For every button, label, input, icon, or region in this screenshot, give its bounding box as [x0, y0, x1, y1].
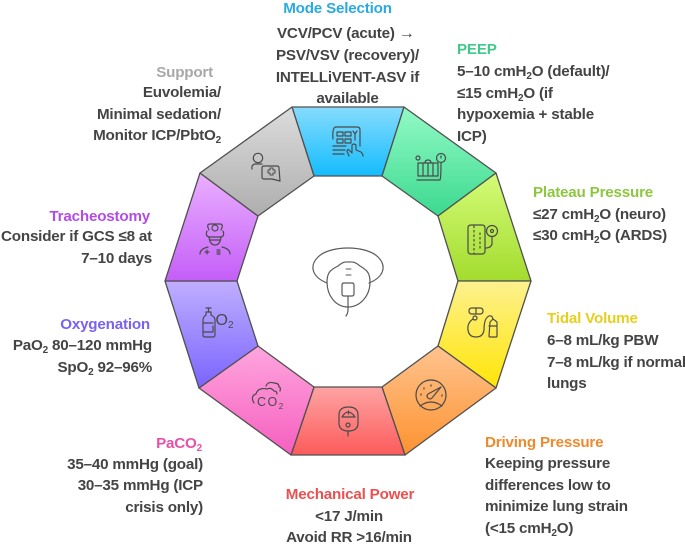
callout: oxygenation: 92–96% — [93, 359, 153, 376]
icon label: CO2: CO — [257, 395, 279, 409]
callout: support — [93, 64, 222, 146]
callout: driving pressure: Driving Pressure — [485, 434, 603, 451]
segment: mechanical power — [291, 387, 405, 455]
segment: support — [200, 107, 314, 216]
callout: PaCO2 — [67, 435, 203, 516]
callout: mode selection: Mode Selection — [283, 0, 392, 17]
callout: PEEP: 5–10 cmH — [457, 63, 526, 80]
segment: tracheostomy — [165, 173, 258, 281]
callout: tidal volume: Tidal Volume — [547, 310, 638, 327]
callout: tracheostomy: 7–10 days — [81, 250, 152, 267]
callout: PaCO2: 2 — [197, 443, 203, 454]
callout: driving pressure: (<15 cmH — [485, 520, 551, 537]
callout: tidal volume: 6–8 mL/kg PBW — [547, 332, 659, 349]
callout: PaCO2: PaCO — [156, 435, 197, 452]
callout: tracheostomy — [1, 208, 152, 267]
callout: driving pressure: differences low to — [485, 477, 611, 494]
segment: oxygenation — [165, 281, 258, 388]
callout: plateau pressure: Plateau Pressure — [533, 184, 653, 201]
callout: tracheostomy: Tracheostomy — [49, 208, 151, 225]
callout: support: Support — [156, 64, 213, 81]
callout: tidal volume — [547, 310, 685, 392]
callout: mechanical power — [286, 486, 415, 544]
callout: PEEP — [457, 41, 610, 145]
callout: PEEP: O (default)/ — [532, 63, 610, 80]
callout: plateau pressure: ≤30 cmH — [533, 227, 594, 244]
segment: driving pressure — [382, 346, 496, 455]
callout: support: 2 — [216, 135, 222, 146]
callout: PEEP: O (if — [523, 85, 554, 102]
icon: oxygen cylinder — [203, 308, 215, 337]
callout: oxygenation: SpO — [57, 359, 88, 376]
callout: driving pressure: Keeping pressure — [485, 455, 610, 472]
segment: mode selection — [292, 107, 404, 176]
callout: PEEP: 2 — [526, 71, 532, 82]
callout: mode selection: available — [316, 90, 379, 107]
callout: plateau pressure — [533, 184, 667, 246]
callout: mode selection: VCV/PCV (acute) → — [277, 25, 415, 42]
callout: mechanical power: <17 J/min — [315, 508, 383, 525]
callout: tidal volume: 7–8 mL/kg if normal — [547, 354, 685, 371]
callout: plateau pressure: O (neuro) — [599, 206, 666, 223]
callout: PEEP: ≤15 cmH — [457, 85, 518, 102]
callout: driving pressure: 2 — [551, 528, 557, 539]
icon: CO2 clouds — [252, 382, 280, 403]
callout: plateau pressure: 2 — [594, 214, 600, 225]
callout: oxygenation: 2 — [88, 367, 94, 378]
icon: ventilator mask (center) — [313, 248, 383, 316]
callout: oxygenation: PaO — [13, 337, 43, 354]
callout: support: Euvolemia/ — [143, 84, 222, 101]
segment: tidal volume — [438, 281, 531, 388]
callout: mode selection: PSV/VSV (recovery)/ — [276, 47, 420, 64]
callout: PEEP: PEEP — [457, 41, 497, 58]
callout: PEEP: ICP) — [457, 128, 487, 145]
icon: tidal volume bottle — [468, 308, 497, 337]
callout: plateau pressure: O (ARDS) — [599, 227, 667, 244]
callout: plateau pressure: ≤27 cmH — [533, 206, 594, 223]
callout: oxygenation: 80–120 mmHg — [48, 337, 152, 354]
icon: PEEP device — [416, 154, 446, 180]
callout: tidal volume: lungs — [547, 375, 586, 392]
callout: oxygenation: Oxygenation — [60, 316, 150, 333]
callout: support: Minimal sedation/ — [97, 106, 222, 123]
icon label: O2: 2 — [228, 320, 234, 331]
icon: user with medical chat — [252, 153, 280, 181]
callout: plateau pressure: 2 — [594, 235, 600, 246]
icon: plateau pressure gauge — [468, 225, 498, 254]
segment: plateau pressure — [438, 173, 531, 281]
icon label: CO2: 2 — [279, 402, 285, 411]
callout: oxygenation: 2 — [43, 345, 49, 356]
callout: oxygenation — [13, 316, 153, 378]
icon: doctor — [200, 224, 230, 254]
callout: PEEP: hypoxemia + stable — [457, 106, 594, 123]
segment: PEEP — [382, 107, 496, 216]
callout: PaCO2: 35–40 mmHg (goal) — [67, 456, 203, 473]
callout: driving pressure: minimize lung strain — [485, 498, 628, 515]
icon: keypad and hand — [333, 127, 363, 156]
callout: mechanical power: Mechanical Power — [286, 486, 415, 503]
icon label: O2: O — [216, 312, 228, 329]
callout: driving pressure — [485, 434, 628, 539]
callout: support: Monitor ICP/PbtO — [93, 127, 216, 144]
callout: PaCO2: crisis only) — [125, 499, 203, 516]
icon: parking meter — [339, 407, 358, 436]
callout: mode selection — [276, 0, 420, 107]
callout: tracheostomy: Consider if GCS ≤8 at — [1, 228, 152, 245]
callout: PEEP: 2 — [518, 93, 524, 104]
callout: driving pressure: O) — [557, 520, 573, 537]
callout: PaCO2: 30–35 mmHg (ICP — [78, 477, 203, 494]
segment: PaCO2 — [199, 346, 314, 455]
callout: mode selection: INTELLiVENT-ASV if — [276, 69, 420, 86]
icon: driving pressure gauge — [416, 380, 446, 410]
